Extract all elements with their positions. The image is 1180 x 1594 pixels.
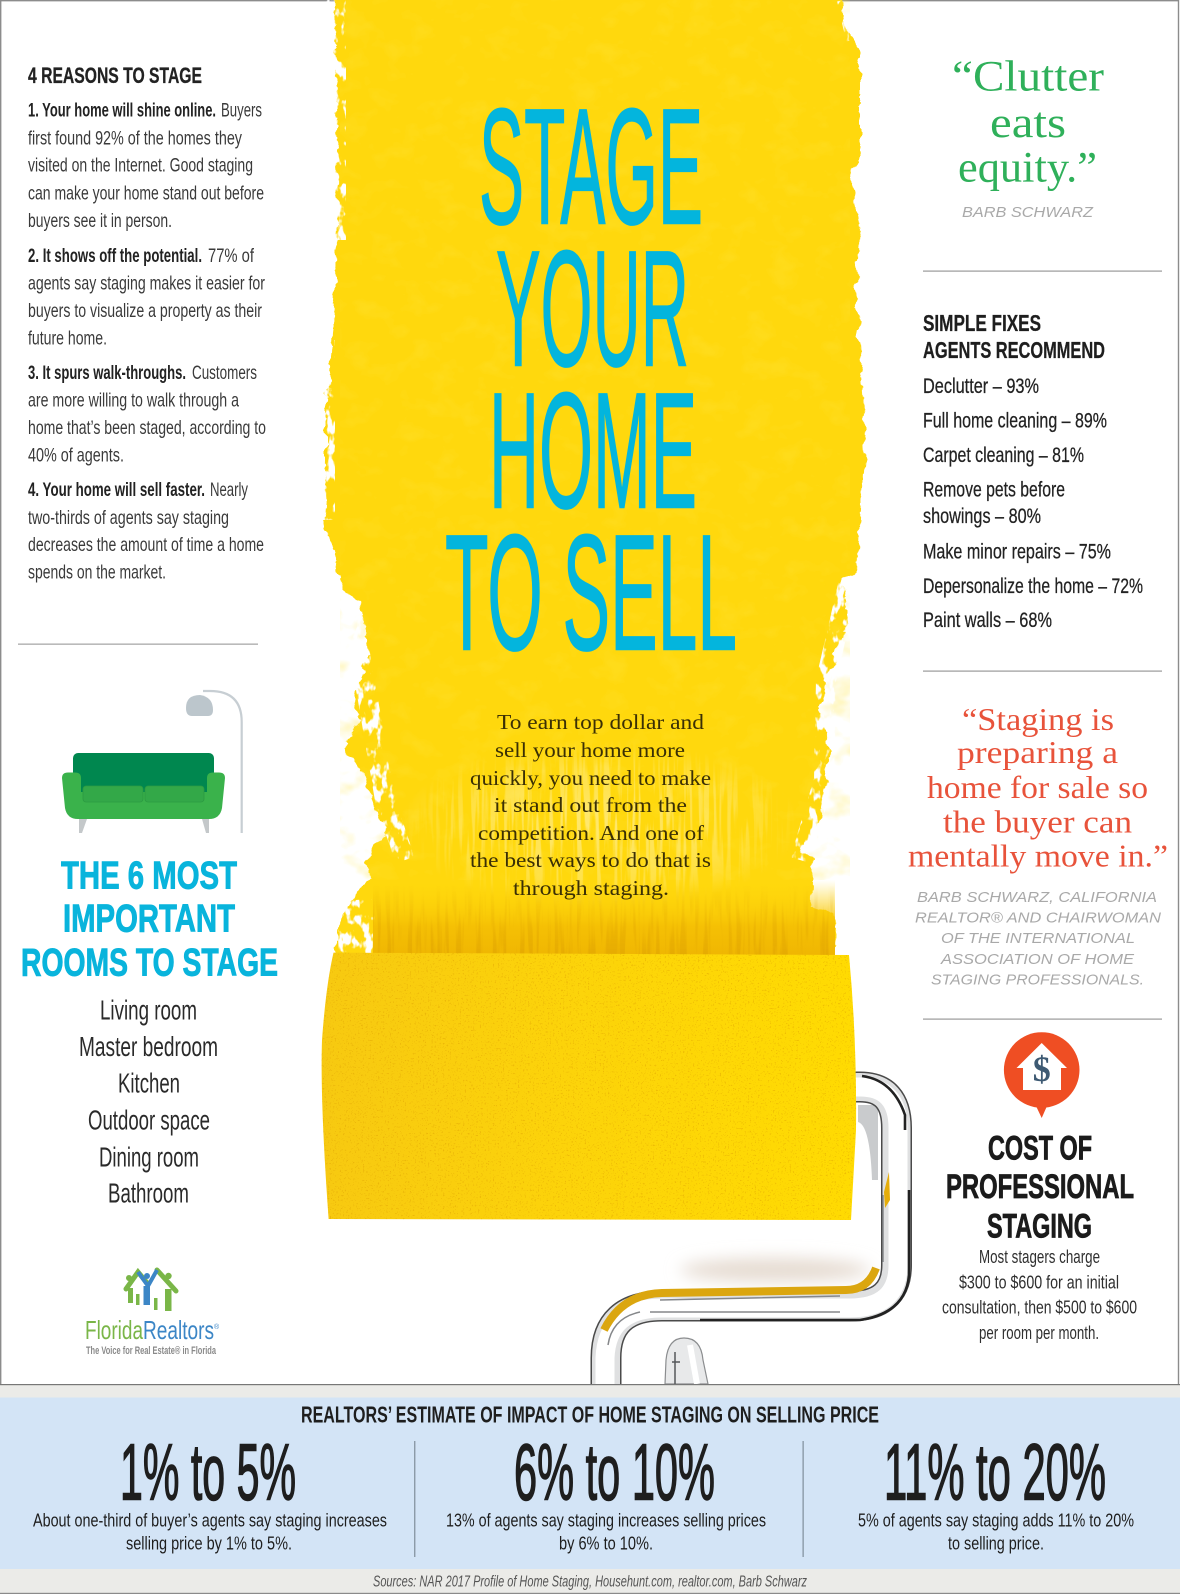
reason 1: can make your home stand out before [28, 182, 264, 204]
list: rooms: Kitchen [118, 1068, 180, 1098]
list: fixes with percentages [923, 375, 1143, 632]
title [445, 74, 737, 684]
stat: 1% to 5%: 1% to 5% [120, 1428, 296, 1516]
text: cost details [942, 1246, 1137, 1343]
reason 1: first found 92% of the homes they [28, 127, 242, 149]
list: rooms: Living room [100, 994, 197, 1026]
list: rooms: Master bedroom [79, 1031, 218, 1062]
reason 1: Buyers [221, 100, 262, 122]
heading: the 6 most important rooms to stage: THE 6 MOST [61, 854, 237, 898]
icon: sofa and floor lamp [62, 691, 242, 833]
text: cost details: Most stagers charge [979, 1246, 1100, 1267]
quote: clutter eats equity: BARB SCHWARZ [962, 204, 1094, 221]
stat: 11% to 20% [858, 1428, 1134, 1554]
intro text: To earn top dollar and [497, 710, 705, 734]
stat: 1% to 5%: About one-third of buyer’s agents say staging increases [33, 1510, 387, 1530]
reason 2: buyers to visualize a property as their [28, 300, 262, 322]
quote: clutter eats equity: eats [990, 100, 1066, 147]
heading: 4 reasons: 4 REASONS TO STAGE [28, 63, 202, 88]
stat: 6% to 10% [446, 1428, 766, 1554]
reason 3: Customers [192, 362, 257, 384]
reason 4: 4. Your home will sell faster. [28, 479, 205, 501]
stat: 6% to 10%: by 6% to 10%. [559, 1532, 653, 1554]
reason 1 [28, 100, 264, 232]
heading: simple fixes [923, 310, 1105, 363]
reason 2: future home. [28, 328, 107, 350]
reason 4: two-thirds of agents say staging [28, 507, 229, 529]
intro text: competition. And one of [478, 821, 704, 845]
intro text: it stand out from the [494, 793, 687, 817]
reason 4: decreases the amount of time a home [28, 534, 264, 556]
quote: clutter eats equity [952, 54, 1104, 221]
text: cost details: per room per month. [979, 1322, 1099, 1343]
heading: cost of professional staging: STAGING [987, 1208, 1092, 1246]
reason 2: 2. It shows off the potential. [28, 245, 202, 267]
logo: Florida Realtors [85, 1270, 220, 1357]
intro text [470, 710, 711, 900]
panel: cost of professional staging [942, 1130, 1137, 1343]
reason 1: 1. Your home will shine online. [28, 100, 216, 122]
quote: staging is preparing a home: REALTOR® AND CHAIRWOMAN [915, 910, 1161, 927]
quote: clutter eats equity: “Clutter [952, 54, 1104, 100]
heading: the 6 most important rooms to stage: ROOMS TO STAGE [21, 942, 278, 984]
icon: logo houses and figures [126, 1270, 176, 1311]
quote: staging is preparing a home [908, 701, 1168, 989]
heading: cost of professional staging: COST OF [988, 1130, 1092, 1168]
panel: simple fixes agents recommend [923, 310, 1143, 632]
list: rooms: Outdoor space [88, 1104, 210, 1136]
heading: the 6 most important rooms to stage [21, 854, 278, 984]
paint roller sleeve [322, 953, 856, 1220]
paint roller handle [604, 1076, 909, 1384]
title: YOUR [496, 216, 689, 400]
intro text: through staging. [513, 876, 669, 900]
reason 4: Nearly [210, 479, 248, 501]
reason 3: are more willing to walk through a [28, 390, 239, 412]
list: rooms: Dining room [99, 1142, 199, 1172]
list: rooms [79, 994, 218, 1208]
quote: staging is preparing a home: preparing a [957, 734, 1118, 770]
quote: staging is preparing a home: BARB SCHWARZ, CALIFORNIA [917, 889, 1157, 906]
quote: staging is preparing a home: “Staging is [962, 701, 1114, 737]
intro text: the best ways to do that is [470, 848, 711, 872]
stat: 1% to 5%: selling price by 1% to 5%. [126, 1532, 292, 1554]
list: fixes with percentages: showings – 80% [923, 505, 1041, 528]
list: fixes with percentages: Make minor repairs – 75% [923, 540, 1111, 564]
panel: realtors' estimate band [0, 1384, 1180, 1594]
logo: Florida Realtors: Realtors [143, 1315, 214, 1345]
reason 3 [28, 362, 266, 467]
icon: house with dollar sign pin [1004, 1032, 1080, 1118]
reason 3: 3. It spurs walk-throughs. [28, 362, 186, 384]
quote: clutter eats equity: equity.” [958, 144, 1097, 192]
quote: staging is preparing a home: mentally move in.” [908, 838, 1168, 874]
stat: 11% to 20%: to selling price. [948, 1532, 1044, 1554]
stat: 6% to 10%: 13% of agents say staging increases selling prices [446, 1510, 766, 1530]
list: fixes with percentages: Full home cleaning – 89% [923, 410, 1107, 433]
heading: the 6 most important rooms to stage: IMPORTANT [63, 898, 235, 940]
text: TO SELL [445, 500, 737, 684]
title: HOME [489, 358, 697, 542]
quote: staging is preparing a home: OF THE INTERNATIONAL [941, 930, 1135, 947]
intro text: sell your home more [495, 738, 685, 762]
text: STAGE [479, 74, 703, 258]
quote: staging is preparing a home: ASSOCIATION OF HOME [940, 951, 1135, 968]
list: fixes with percentages: Paint walls – 68% [923, 609, 1052, 632]
reason 2 [28, 245, 265, 350]
panel: 4 reasons to stage [28, 63, 266, 584]
list: fixes with percentages: Declutter – 93% [923, 375, 1039, 398]
reason 3: home that’s been staged, according to [28, 417, 266, 439]
paint stroke [324, 0, 865, 960]
reason 1: visited on the Internet. Good staging [28, 155, 253, 177]
quote: staging is preparing a home: home for sale so [927, 769, 1148, 805]
reason 4: spends on the market. [28, 562, 166, 584]
text: cost details: $300 to $600 for an initial [959, 1272, 1119, 1292]
heading: simple fixes: AGENTS RECOMMEND [923, 337, 1105, 363]
text: sources: Sources: NAR 2017 Profile of Home Staging, Househunt.com, realtor.com, Barb Schwarz [373, 1574, 807, 1590]
heading: estimate of impact: REALTORS’ ESTIMATE OF IMPACT OF HOME STAGING ON SELLING PRICE [301, 1402, 879, 1428]
logo: Florida Realtors: ® [214, 1323, 220, 1331]
reason 3: 40% of agents. [28, 445, 124, 467]
icon: house with dollar sign pin: $ [1033, 1049, 1051, 1089]
list: fixes with percentages: Remove pets before [923, 478, 1065, 502]
list: rooms: Bathroom [108, 1178, 189, 1208]
reason 4 [28, 479, 264, 584]
heading: cost of professional staging [946, 1130, 1134, 1246]
stat: 1% to 5% [33, 1428, 387, 1554]
reason 1: buyers see it in person. [28, 210, 172, 232]
logo: Florida Realtors: Florida [85, 1315, 143, 1345]
quote: staging is preparing a home: STAGING PROFESSIONALS. [931, 972, 1144, 989]
quote: staging is preparing a home: the buyer can [943, 804, 1132, 840]
reason 2: 77% of [208, 245, 254, 267]
stat: 6% to 10%: 6% to 10% [514, 1428, 715, 1516]
logo: Florida Realtors: The Voice for Real Estate® in Florida [86, 1345, 217, 1357]
heading: simple fixes: SIMPLE FIXES [923, 310, 1041, 336]
intro text: quickly, you need to make [470, 766, 711, 790]
reason 2: agents say staging makes it easier for [28, 273, 265, 295]
list: fixes with percentages: Carpet cleaning – 81% [923, 444, 1084, 467]
